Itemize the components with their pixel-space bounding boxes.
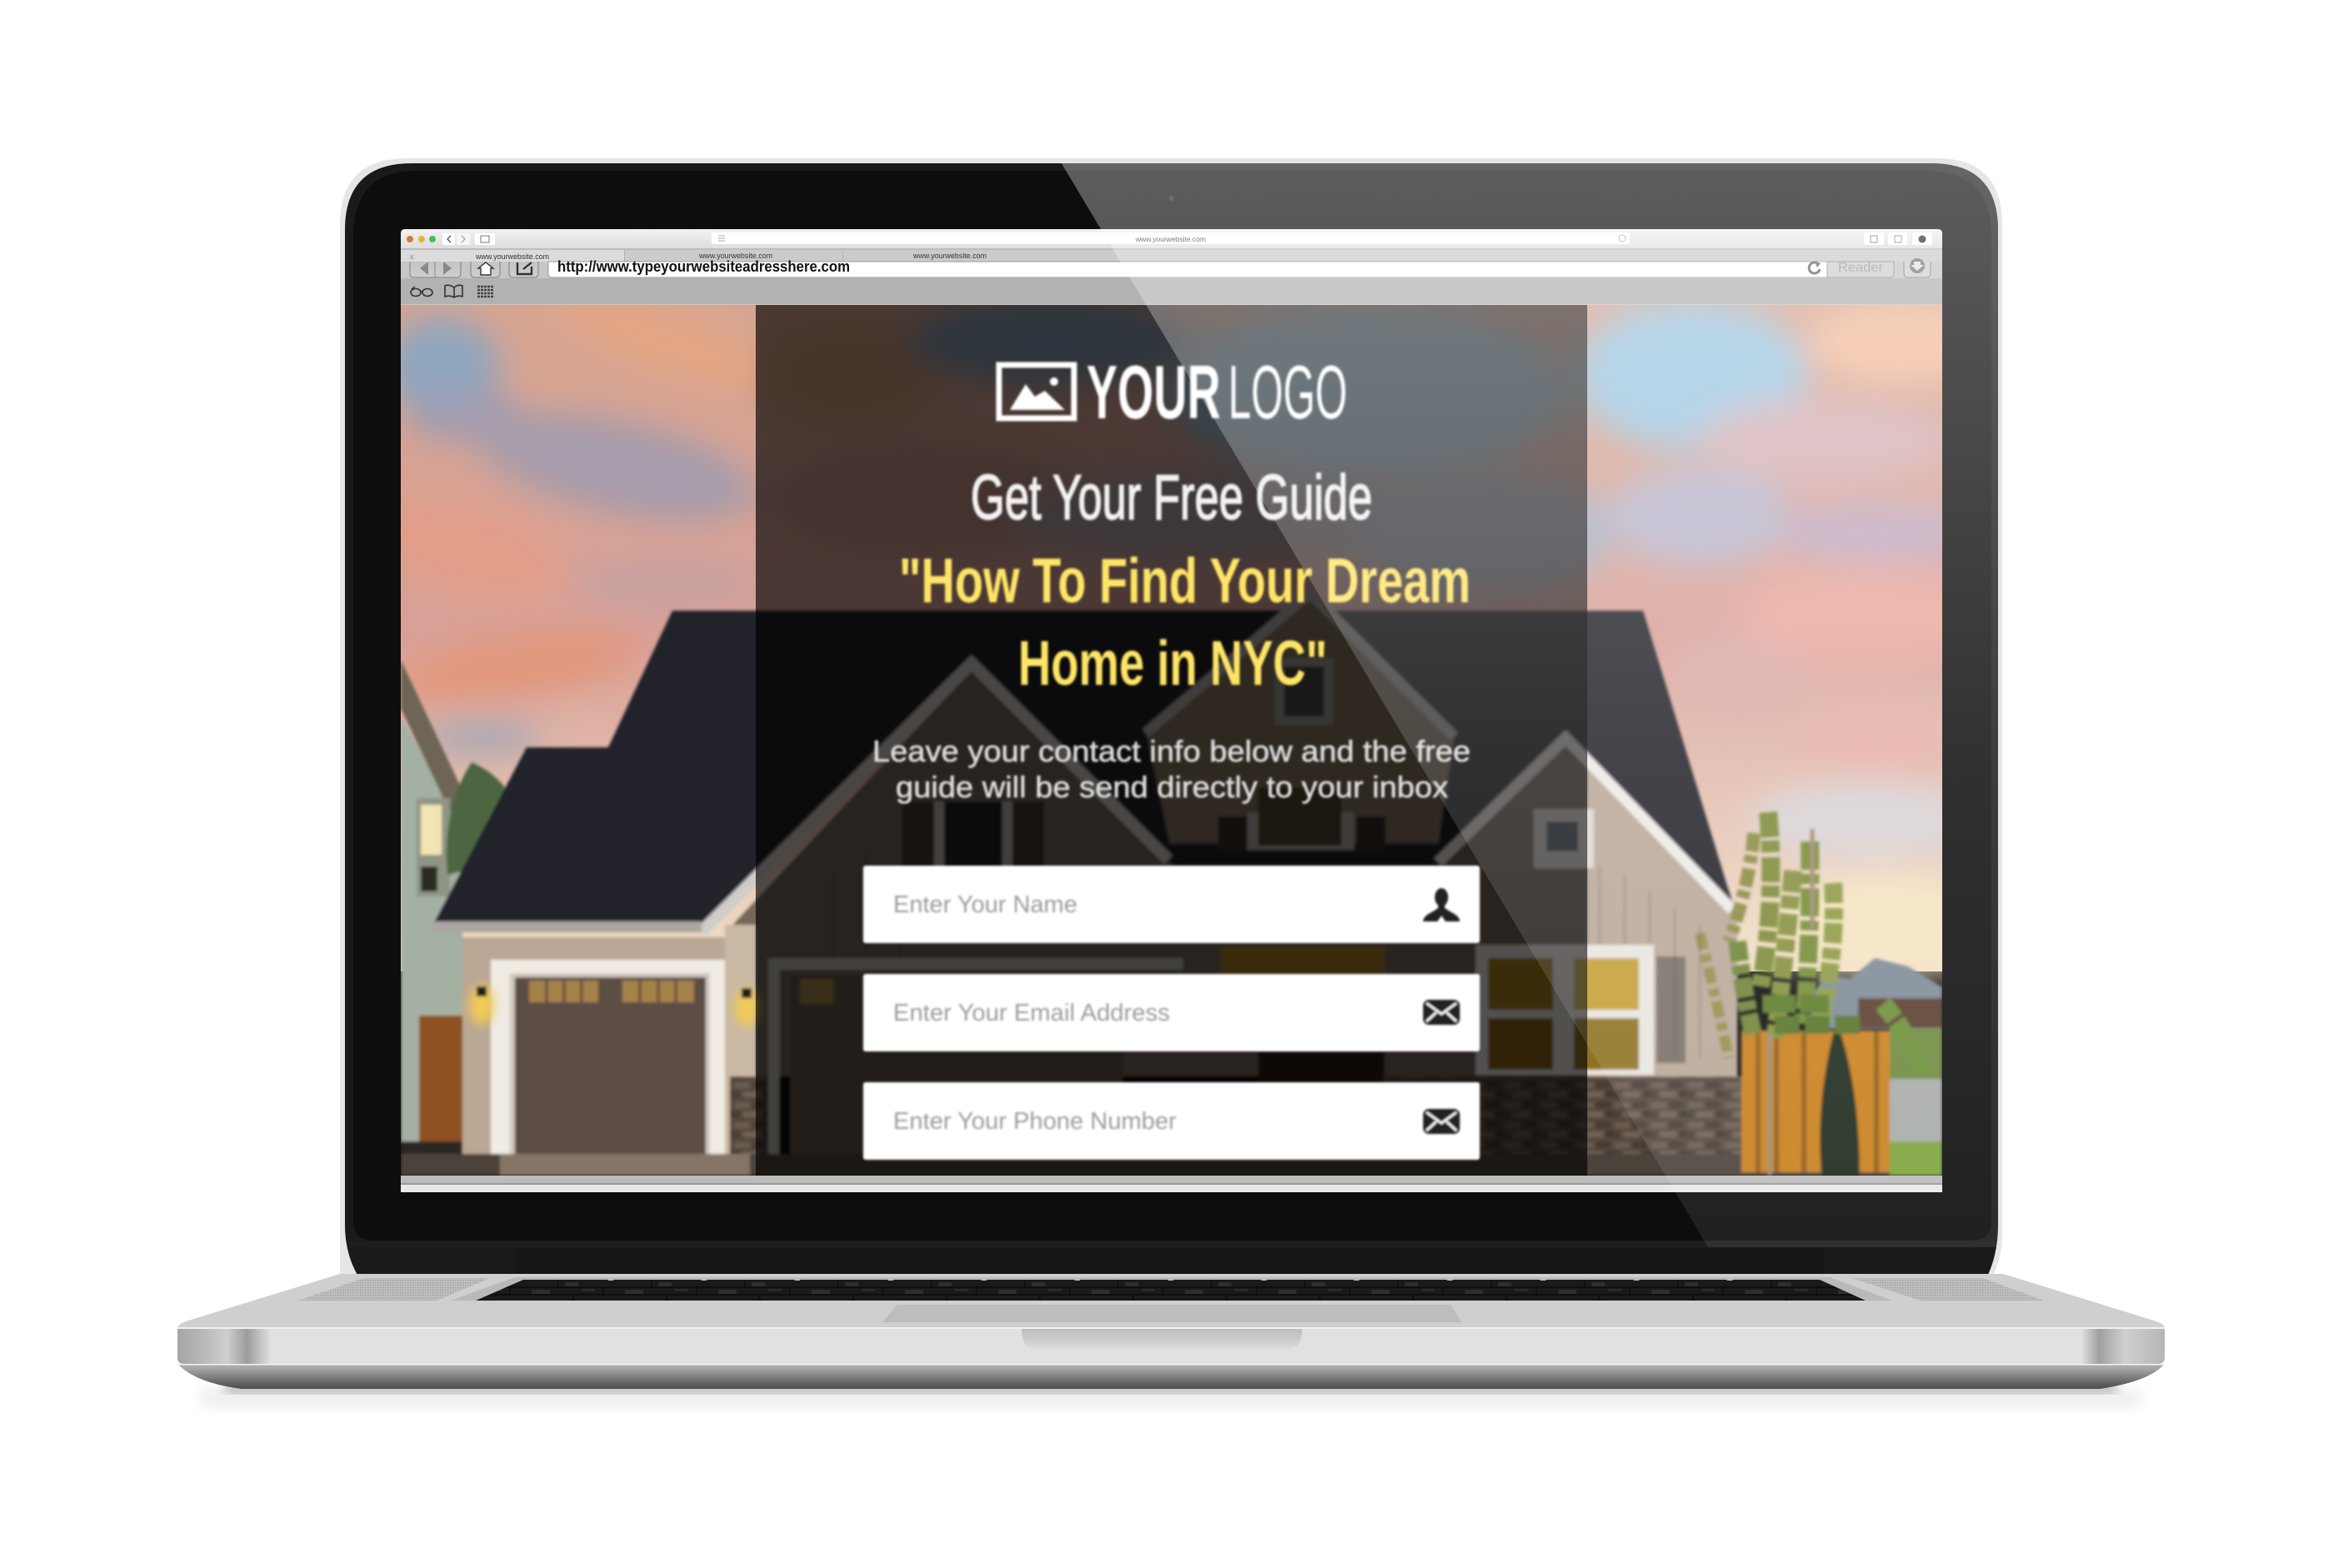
- form field: name: [863, 866, 1480, 943]
- speaker left: [298, 1278, 490, 1301]
- form field: phone: [863, 1082, 1480, 1160]
- tab strip: x: [410, 252, 414, 261]
- bookmarks bar: [401, 278, 1942, 305]
- description text: guide will be send directly to your inbox: [896, 770, 1448, 804]
- page content: [863, 351, 1480, 1160]
- right small window: [1534, 809, 1594, 868]
- form field: phone: Enter Your Phone Number: [893, 1108, 1176, 1135]
- browser chrome: [401, 229, 1942, 305]
- logo: [999, 351, 1347, 435]
- icon: picture frame: [999, 365, 1074, 418]
- right large window: [1476, 945, 1686, 1075]
- heading: guide title: Home in NYC": [1018, 628, 1327, 699]
- title bar: www.yourwebsite.com: [1135, 235, 1206, 243]
- icon: person: [1423, 888, 1460, 921]
- orange fence: [1741, 1021, 1890, 1176]
- heading: guide title: [899, 546, 1471, 699]
- hinge: [516, 1248, 1825, 1274]
- underside: [177, 1364, 2165, 1389]
- description text: Leave your contact info below and the free: [872, 734, 1471, 768]
- heading: guide title: "How To Find Your Dream: [899, 546, 1471, 617]
- gable trim lines: [702, 593, 1732, 931]
- dark overlay panel: [756, 305, 1587, 1176]
- neighbour house: [401, 660, 505, 1176]
- form field: email: [863, 974, 1480, 1051]
- icon: envelope: [1423, 1000, 1460, 1025]
- screen bottom strip: [401, 1176, 1942, 1192]
- laptop lid: [340, 158, 2002, 1276]
- logo wordmark: YOUR: [1087, 351, 1221, 435]
- stone base and ground: [401, 1076, 1942, 1176]
- laptop base: [177, 1274, 2165, 1389]
- camera: [1169, 196, 1174, 201]
- toolbar: [401, 258, 1942, 278]
- icon: grid: [477, 287, 494, 297]
- description text: [872, 734, 1471, 804]
- form field: name: Enter Your Name: [893, 891, 1077, 918]
- house walls: [462, 597, 1737, 1154]
- toolbar: http://www.typeyourwebsiteadresshere.com: [557, 258, 850, 275]
- page photo: [359, 281, 2000, 1176]
- keyboard: [476, 1277, 1866, 1301]
- form field: email: Enter Your Email Address: [893, 1000, 1170, 1026]
- icon: envelope: [1423, 1109, 1460, 1134]
- deck: [177, 1274, 2165, 1328]
- logo wordmark: LOGO: [1228, 351, 1347, 435]
- browser screen: [359, 229, 2000, 1192]
- front edge: [177, 1328, 2165, 1364]
- garage eave: [433, 921, 702, 932]
- screen glare: [1062, 163, 1998, 1247]
- speaker right: [1851, 1278, 2044, 1301]
- thumb notch: [1022, 1329, 1302, 1349]
- porch lamps: [469, 985, 758, 1027]
- icon: book: [445, 285, 462, 297]
- distant landscape: [1811, 958, 1942, 1176]
- sunset sky: [359, 281, 2000, 975]
- tab strip: www.yourwebsite.com: [912, 252, 987, 260]
- toolbar: Reader: [1838, 261, 1884, 275]
- tree: [1700, 812, 1925, 1176]
- keyboard surround: [451, 1277, 1892, 1301]
- title bar: [401, 229, 1942, 250]
- tab strip: www.yourwebsite.com: [475, 252, 549, 261]
- tab strip: www.yourwebsite.com: [698, 252, 772, 260]
- heading: get your free guide: Get Your Free Guide: [971, 462, 1372, 533]
- ground shadow: [200, 1386, 2141, 1406]
- trackpad: [882, 1305, 1461, 1322]
- centre garage and stone: [730, 946, 1385, 1158]
- tab strip: [401, 250, 1942, 262]
- centre gable windows: [902, 658, 1386, 868]
- siding lines: [833, 850, 1700, 1058]
- roof: [433, 611, 1737, 924]
- icon: reading glasses: [411, 287, 432, 297]
- left garage door: [491, 960, 725, 1156]
